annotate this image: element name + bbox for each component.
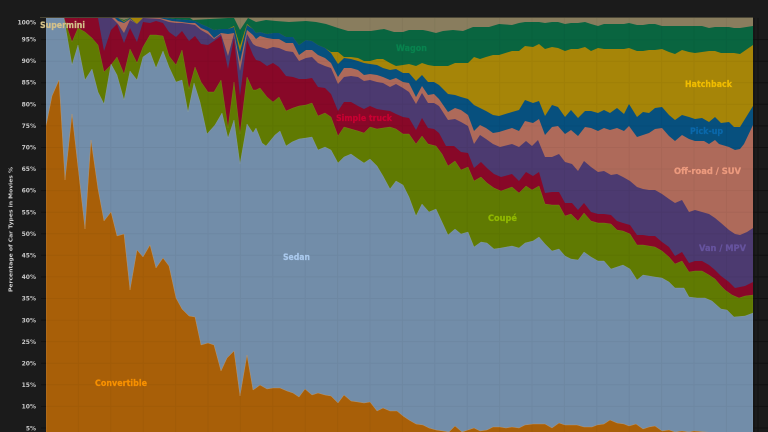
y axis tick labels: 15%	[22, 382, 36, 389]
area: Simple truck	[64, 18, 753, 298]
y axis tick labels: 80%	[22, 102, 36, 108]
area: Supermini	[118, 18, 753, 33]
y axis title: Percentage of Car Types in Movies %	[8, 167, 14, 292]
label: Wagon: Wagon	[396, 44, 427, 54]
area: Off-road / SUV	[112, 18, 753, 235]
label: Supermini: Supermini	[40, 21, 85, 31]
label: Simple truck: Simple truck	[336, 114, 392, 124]
label: Sedan: Sedan	[283, 253, 310, 263]
y axis tick labels: 90%	[22, 58, 36, 65]
y axis tick labels: 100%	[17, 20, 36, 26]
y axis tick labels: 50%	[22, 231, 36, 238]
label: Van / MPV: Van / MPV	[699, 244, 746, 254]
label: Hatchback: Hatchback	[685, 80, 732, 90]
area: Pick-up	[115, 18, 753, 150]
area: Convertible	[46, 80, 753, 432]
y axis tick labels: 75%	[22, 123, 36, 130]
y axis tick labels: 60%	[22, 188, 36, 194]
y axis tick labels: 85%	[22, 80, 36, 86]
y axis tick labels: 35%	[22, 296, 36, 302]
y axis tick labels: 25%	[22, 339, 36, 346]
y axis tick labels: 40%	[22, 274, 36, 281]
y axis tick labels	[17, 20, 36, 432]
y axis tick labels: 30%	[22, 318, 36, 324]
y axis tick labels: 95%	[22, 36, 36, 44]
area: Hatchback	[118, 18, 753, 127]
y axis tick labels: 65%	[22, 166, 36, 173]
label: Convertible: Convertible	[95, 379, 147, 389]
area: Wagon	[118, 18, 753, 66]
area: Van / MPV	[98, 18, 753, 288]
label: Coupé: Coupé	[488, 213, 517, 224]
y axis tick labels: 55%	[22, 210, 36, 216]
y axis tick labels: 70%	[22, 144, 36, 152]
label: Pick-up: Pick-up	[690, 127, 723, 137]
area: Coupé	[64, 18, 753, 317]
y axis tick labels: 10%	[22, 404, 36, 410]
y axis tick labels: 45%	[22, 252, 36, 260]
label: Off-road / SUV: Off-road / SUV	[674, 167, 741, 177]
y axis tick labels: 20%	[22, 360, 36, 368]
